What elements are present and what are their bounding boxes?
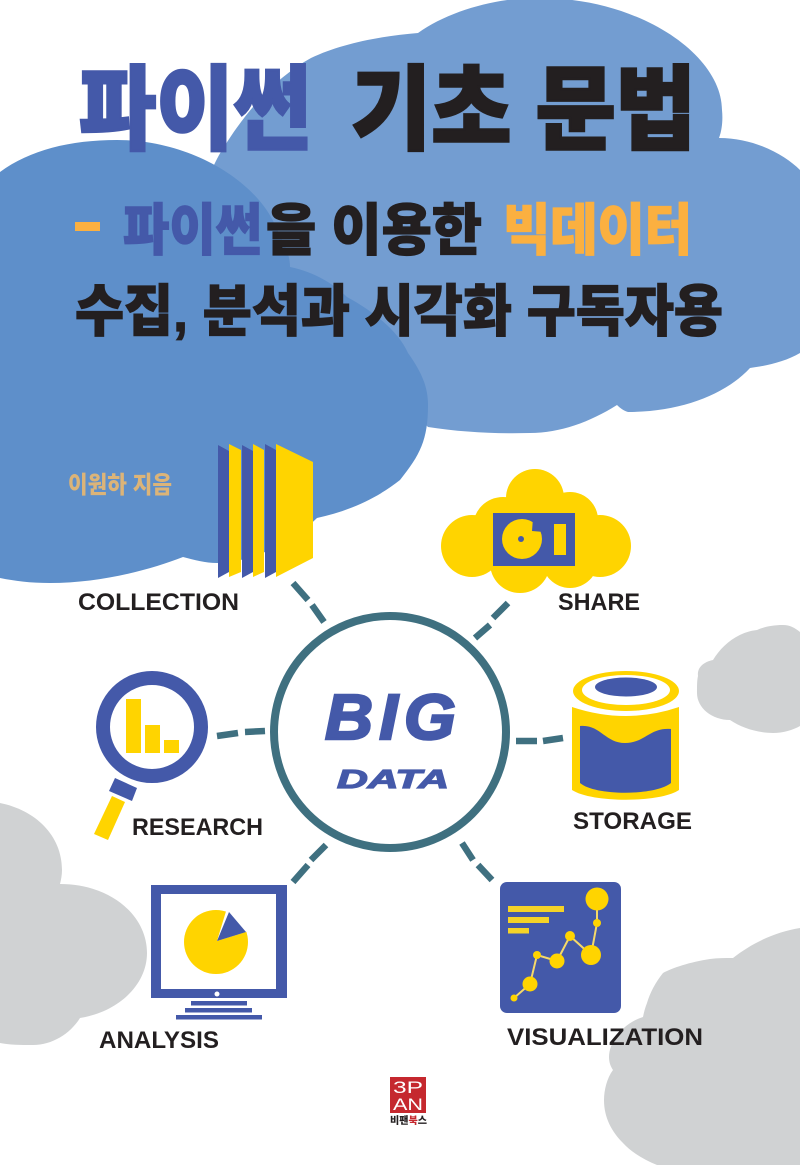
label: visualization: VISUALIZATION [507,1024,703,1051]
label: share: SHARE [558,589,640,616]
subtitle line 1: 빅데이터 [503,199,692,262]
publisher logo: 3P [393,1078,423,1097]
hub circle: big data: DATA [337,764,449,794]
label: analysis: ANALYSIS [99,1027,219,1054]
title [79,60,696,162]
icon: analysis monitor [151,885,287,1020]
icon: research magnifier [94,678,201,840]
background cloud: mid blue [0,140,428,583]
label: research: RESEARCH [132,814,263,841]
gray cloud: bottom right [604,928,800,1165]
hub circle: big data [274,616,506,848]
icon: collection [218,444,313,578]
icon: share cloud [441,469,631,593]
subtitle line 1: 을 이용한 [266,199,482,262]
background cloud: light blue [200,0,800,433]
title: 파이썬 [79,60,311,162]
author: 이원하 지음 [68,472,172,499]
subtitle line 1 [75,199,692,262]
title: 기초 문법 [351,60,696,162]
publisher logo [390,1077,427,1127]
connectors [217,583,563,882]
gray cloud: right [697,625,800,733]
publisher logo: 비팬북스 [390,1114,427,1127]
hub circle: big data: BIG [325,681,462,753]
gray cloud: bottom left [0,803,147,1045]
subtitle line 1: 파이썬 [123,199,262,262]
subtitle line 2: 수집, 분석과 시각화 구독자용 [75,280,723,343]
icon: storage cylinder [572,671,679,800]
label: collection: COLLECTION [78,589,239,616]
icon: visualization chart [500,882,621,1013]
publisher logo: AN [393,1095,423,1114]
label: storage: STORAGE [573,808,692,835]
